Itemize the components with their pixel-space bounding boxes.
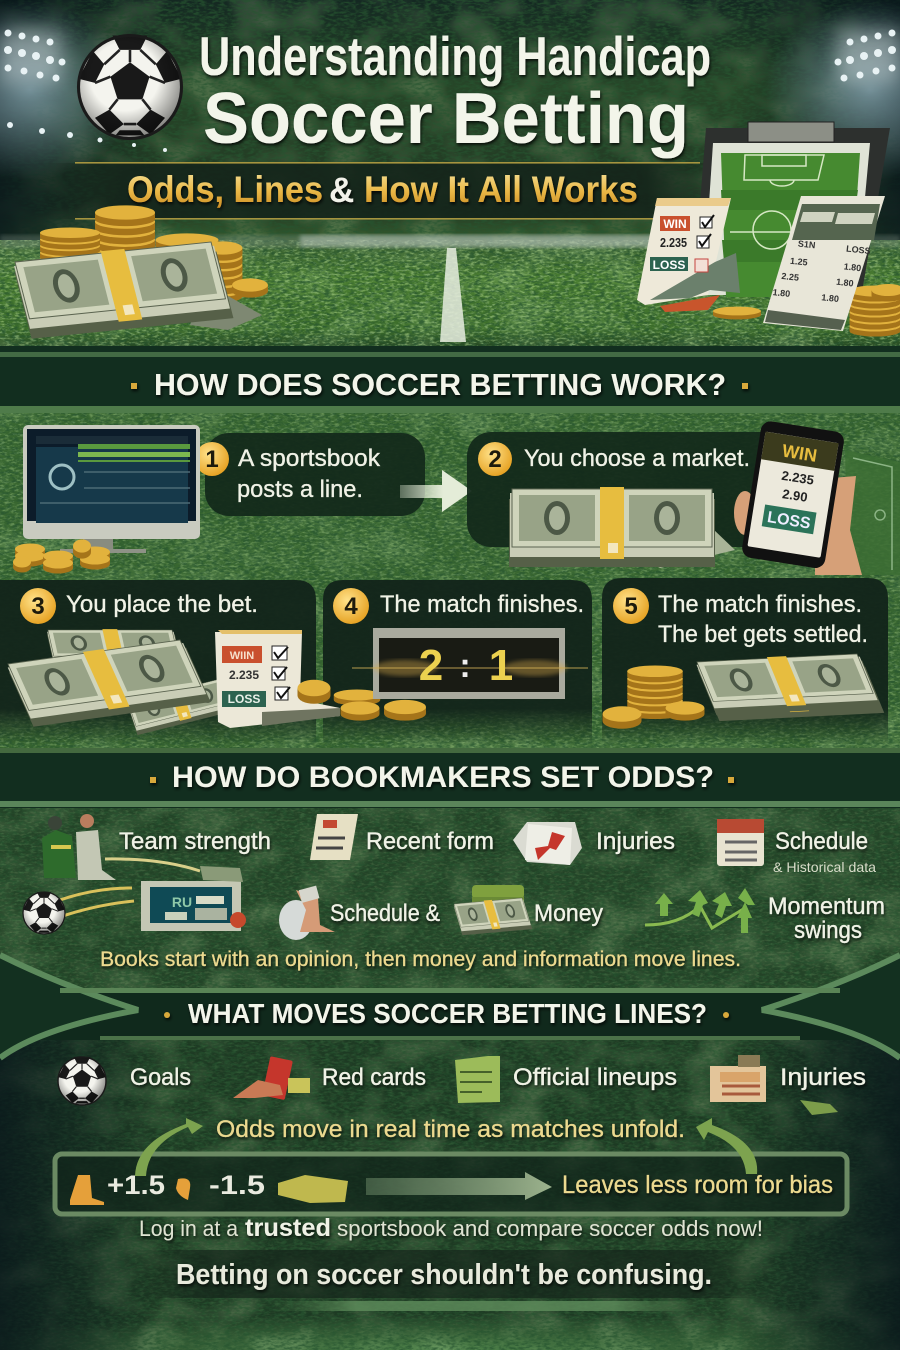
call to action: log in [139,1214,763,1242]
icon: bet slip right: 1.80 [772,287,791,299]
panel: step 3: You place the bet. [66,591,258,618]
panel: step 1 [195,433,425,516]
icon: bet slip left: 2.235 [660,235,687,250]
section band 3 with curved pitch lines [0,955,900,1058]
icon: hand holding phone [734,420,862,575]
icon: bet slip right: 2.25 [781,271,799,283]
panel: step 1: posts a line. [237,476,363,503]
icon: bet slip, step 3: LOSS [228,692,260,706]
icon: soccer ball logo [78,36,182,138]
icon: hand holding phone: WIN [781,441,818,466]
caption: odds move in real time: Odds move in real time as matches unfold. [216,1116,685,1143]
panel: step 4: 4 [344,593,358,620]
panel: step 1: 1 [205,446,219,473]
scoreboard: 2:1: 1 [489,641,513,690]
subtitle [127,169,638,210]
panel: step 2: You choose a market. [524,445,750,472]
panel: step 5: The bet gets settled. [658,621,868,648]
panel: step 1: A sportsbook [238,445,381,472]
icon: hand holding phone: LOSS [766,509,812,533]
icon: bet slip, step 3: WIIN [230,650,254,662]
icon: bet slip right: LOSS [846,244,871,256]
factor: official lineups [455,1056,677,1103]
icon: monitor with odds screen [13,425,200,574]
call to action: log in: trusted [245,1214,331,1242]
factor: schedule calendar: & Historical data [773,859,876,875]
factor: schedule calendar [717,819,876,875]
panel: step 3: 3 [31,593,45,620]
title: Understanding Handicap [199,25,711,87]
heading: what moves soccer betting lines: WHAT MOVES SOCCER BETTING LINES? [188,998,707,1029]
closing band [130,1250,770,1311]
factor: team strength [42,814,271,880]
panel: step 5 [602,578,888,745]
factor: team strength: Team strength [119,828,271,855]
panel: step 2 [467,432,797,568]
icon: bet slip left: LOSS [653,258,685,272]
factor: injuries newspaper [710,1055,866,1115]
factor: schedule and person reading [279,886,440,940]
icon: bet slip right: 1.80 [821,292,839,304]
title [199,25,711,159]
call to action: log in: sportsbook and compare soccer odds now! [337,1216,763,1241]
scoreboard: 2:1 [352,628,588,699]
icon: bet slip left [637,198,740,312]
icon: board with team data: RU [172,894,192,910]
factor: money [453,885,603,935]
scoreboard: 2:1: 2 [419,641,443,690]
icon: bet slip right: 1.25 [790,256,808,268]
title: Soccer Betting [203,79,689,159]
arrow: curved up left [135,1118,203,1176]
heading: how does soccer betting work: HOW DOES SOCCER BETTING WORK? [154,367,726,402]
factor: schedule and person reading: Schedule & [330,900,440,927]
halfway line on pitch [440,248,466,342]
icon: board with team data [141,866,246,931]
panel: handicap line box: -1.5 [209,1170,265,1200]
factor: money: Money [534,900,603,927]
panel: step 5: 5 [624,593,638,620]
panel: handicap line box: Leaves less room for bias [562,1171,833,1199]
factor: goals: Goals [130,1064,191,1091]
subtitle: Odds, Lines [127,169,323,210]
factor: momentum swings arrows [645,888,885,944]
arrow: step 1 to step 2 [400,470,472,512]
subtitle: How It All Works [364,169,638,210]
icon: coins and cash, step 5 [602,653,884,729]
factor: recent form [310,814,494,860]
icon: bet slip right: 1.80 [836,277,854,289]
icon: hand holding phone: 2.235 [780,468,815,488]
factor: injuries: Injuries [596,828,675,855]
stadium advertising boards [0,235,900,248]
panel: step 2: 2 [488,446,502,473]
icon: coin stack, header right [713,284,900,336]
factor: momentum swings arrows: Momentum [768,893,885,920]
panel: step 3 [0,580,316,745]
call to action: log in: Log in at a [139,1216,239,1241]
section header band 2 [0,748,900,808]
subtitle band [40,162,730,220]
scoreboard: 2:1: : [459,647,471,685]
factor: schedule calendar: Schedule [775,828,868,855]
stadium floodlights [0,0,900,180]
panel: step 4 [323,580,592,745]
closing line: Betting on soccer shouldn't be confusing. [176,1259,712,1291]
arrow: curved up right [696,1118,757,1174]
icon: hand holding phone: 2.90 [781,486,809,505]
icon: soccer ball with motion trails [23,859,200,934]
factor: red cards [233,1056,426,1100]
panel: step 4: The match finishes. [380,591,584,618]
icon: bet slip left: WIN [663,217,687,231]
section header band 1 [0,346,900,413]
icon: bet slip right [763,196,885,331]
factor: official lineups: Official lineups [513,1064,677,1091]
icon: mini pitch, step 2 [845,450,900,575]
factor: injuries [513,822,675,865]
icon: cash stacks, step 3 [5,629,236,735]
icon: bet slip right: 1.80 [843,261,862,273]
factor: red cards: Red cards [322,1064,426,1091]
panel: handicap line box: +1.5 [107,1170,165,1200]
factor: goals [58,1057,191,1105]
icon: bet slip, step 3 [215,630,340,728]
icon: coins between steps 3 and 4 [298,680,426,721]
panel: step 5: The match finishes. [658,591,862,618]
panel: handicap line box [55,1154,847,1214]
factor: recent form: Recent form [366,828,494,855]
icon: coin stacks and cash, header left [12,205,268,339]
icon: bet slip, step 3: 2.235 [229,668,259,682]
icon: bet slip right: S1N [797,239,816,250]
factor: injuries newspaper: Injuries [780,1064,866,1091]
heading: how do bookmakers set odds: HOW DO BOOKMAKERS SET ODDS? [172,761,714,794]
factor: momentum swings arrows: swings [794,917,862,944]
subtitle: & [329,171,354,210]
icon: clipboard with pitch [693,122,890,297]
caption: books start with an opinion: Books start with an opinion, then money and information move lines. [100,948,741,971]
